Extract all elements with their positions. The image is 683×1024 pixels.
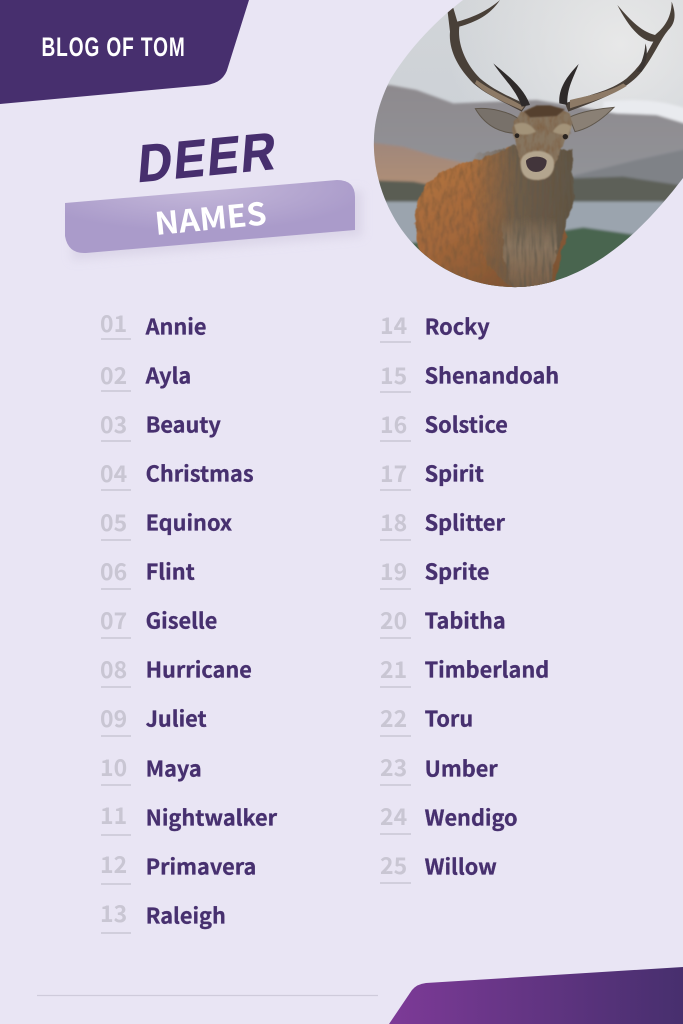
row 17 Spirit bbox=[380, 455, 484, 490]
row 24 Wendigo bbox=[380, 798, 518, 834]
row 10 Maya: Maya bbox=[146, 752, 202, 783]
row 13 Raleigh bbox=[100, 895, 226, 933]
row 04 Christmas: 04 bbox=[100, 455, 127, 489]
brand banner bbox=[0, 0, 249, 104]
row 01 Annie: 01 bbox=[100, 305, 127, 339]
row 07 Giselle: Giselle bbox=[146, 604, 217, 635]
row 01 Annie bbox=[100, 305, 207, 341]
row 14 Rocky bbox=[380, 307, 490, 342]
row 13 Raleigh: 13 bbox=[100, 895, 127, 929]
names list: left column bbox=[100, 305, 278, 933]
row 16 Solstice: Solstice bbox=[425, 408, 508, 439]
row 21 Timberland: Timberland bbox=[425, 653, 549, 684]
row 14 Rocky: 14 bbox=[380, 307, 407, 341]
row 18 Splitter: Splitter bbox=[425, 506, 505, 537]
row 23 Umber bbox=[380, 749, 498, 785]
row 22 Toru: 22 bbox=[380, 700, 407, 734]
footer accent shape bbox=[389, 967, 683, 1024]
row 12 Primavera bbox=[100, 846, 256, 884]
row 20 Tabitha: 20 bbox=[380, 602, 407, 636]
row 05 Equinox bbox=[100, 504, 232, 540]
stag body bbox=[415, 147, 567, 297]
row 03 Beauty: Beauty bbox=[146, 408, 221, 439]
row 17 Spirit: Spirit bbox=[425, 457, 484, 488]
row 25 Willow bbox=[380, 847, 497, 883]
row 01 Annie: Annie bbox=[145, 310, 207, 341]
row 21 Timberland bbox=[380, 651, 549, 687]
row 22 Toru: Toru bbox=[425, 702, 473, 733]
row 04 Christmas bbox=[100, 455, 254, 490]
row 17 Spirit: 17 bbox=[380, 455, 407, 489]
photo: stag in a blob frame bbox=[363, 0, 683, 300]
row 06 Flint: 06 bbox=[100, 553, 127, 587]
row 10 Maya bbox=[100, 749, 202, 785]
row 06 Flint bbox=[100, 553, 195, 589]
row 18 Splitter bbox=[380, 504, 505, 540]
row 25 Willow: Willow bbox=[425, 850, 497, 881]
row 09 Juliet bbox=[100, 700, 207, 736]
row 07 Giselle bbox=[100, 602, 217, 638]
row 07 Giselle: 07 bbox=[100, 602, 127, 636]
stag chest bbox=[502, 223, 558, 288]
row 15 Shenandoah: Shenandoah bbox=[425, 359, 559, 390]
row 11 Nightwalker: Nightwalker bbox=[146, 801, 278, 832]
row 08 Hurricane: 08 bbox=[100, 651, 127, 685]
row 12 Primavera: 12 bbox=[100, 846, 127, 880]
eyes bbox=[515, 133, 519, 138]
head bbox=[513, 107, 572, 179]
row 06 Flint: Flint bbox=[146, 555, 195, 586]
title: Deer: DEER bbox=[136, 121, 278, 194]
row 08 Hurricane bbox=[100, 651, 252, 687]
row 19 Sprite: Sprite bbox=[425, 555, 489, 586]
row 19 Sprite: 19 bbox=[380, 553, 407, 587]
left ear bbox=[475, 108, 520, 133]
row 11 Nightwalker: 11 bbox=[100, 797, 127, 831]
row 09 Juliet: 09 bbox=[100, 700, 127, 734]
row 21 Timberland: 21 bbox=[380, 651, 407, 685]
row 19 Sprite bbox=[380, 553, 489, 589]
row 20 Tabitha bbox=[380, 602, 506, 638]
row 03 Beauty: 03 bbox=[100, 406, 127, 440]
subtitle: NAMES bbox=[153, 188, 268, 244]
row 08 Hurricane: Hurricane bbox=[146, 653, 252, 684]
row 05 Equinox: 05 bbox=[100, 504, 127, 538]
row 09 Juliet: Juliet bbox=[146, 702, 207, 733]
right ear bbox=[569, 107, 614, 132]
row 02 Ayla bbox=[100, 357, 191, 391]
row 22 Toru bbox=[380, 700, 473, 736]
row 02 Ayla: 02 bbox=[100, 357, 127, 391]
right antler bbox=[559, 2, 675, 112]
row 15 Shenandoah: 15 bbox=[380, 357, 407, 391]
row 04 Christmas: Christmas bbox=[146, 457, 254, 488]
row 05 Equinox: Equinox bbox=[146, 506, 232, 537]
row 23 Umber: Umber bbox=[425, 752, 498, 783]
names list: right column bbox=[380, 307, 559, 883]
row 11 Nightwalker bbox=[100, 797, 278, 835]
row 10 Maya: 10 bbox=[100, 749, 127, 783]
row 13 Raleigh: Raleigh bbox=[146, 899, 226, 930]
row 24 Wendigo: 24 bbox=[380, 798, 407, 832]
row 02 Ayla: Ayla bbox=[145, 359, 191, 390]
row 03 Beauty bbox=[100, 406, 221, 441]
row 15 Shenandoah bbox=[380, 357, 559, 392]
row 16 Solstice: 16 bbox=[380, 406, 407, 440]
row 20 Tabitha: Tabitha bbox=[425, 604, 506, 635]
muzzle bbox=[521, 151, 554, 180]
row 14 Rocky: Rocky bbox=[425, 310, 490, 341]
row 23 Umber: 23 bbox=[380, 749, 407, 783]
row 24 Wendigo: Wendigo bbox=[425, 801, 518, 832]
row 16 Solstice bbox=[380, 406, 508, 441]
left antler bbox=[447, 0, 530, 112]
title band: Names bbox=[65, 180, 362, 260]
brand name: BLOG OF TOM bbox=[42, 32, 185, 62]
row 18 Splitter: 18 bbox=[380, 504, 407, 538]
row 12 Primavera: Primavera bbox=[146, 850, 256, 881]
row 25 Willow: 25 bbox=[380, 847, 407, 881]
stag mane bbox=[470, 145, 574, 293]
